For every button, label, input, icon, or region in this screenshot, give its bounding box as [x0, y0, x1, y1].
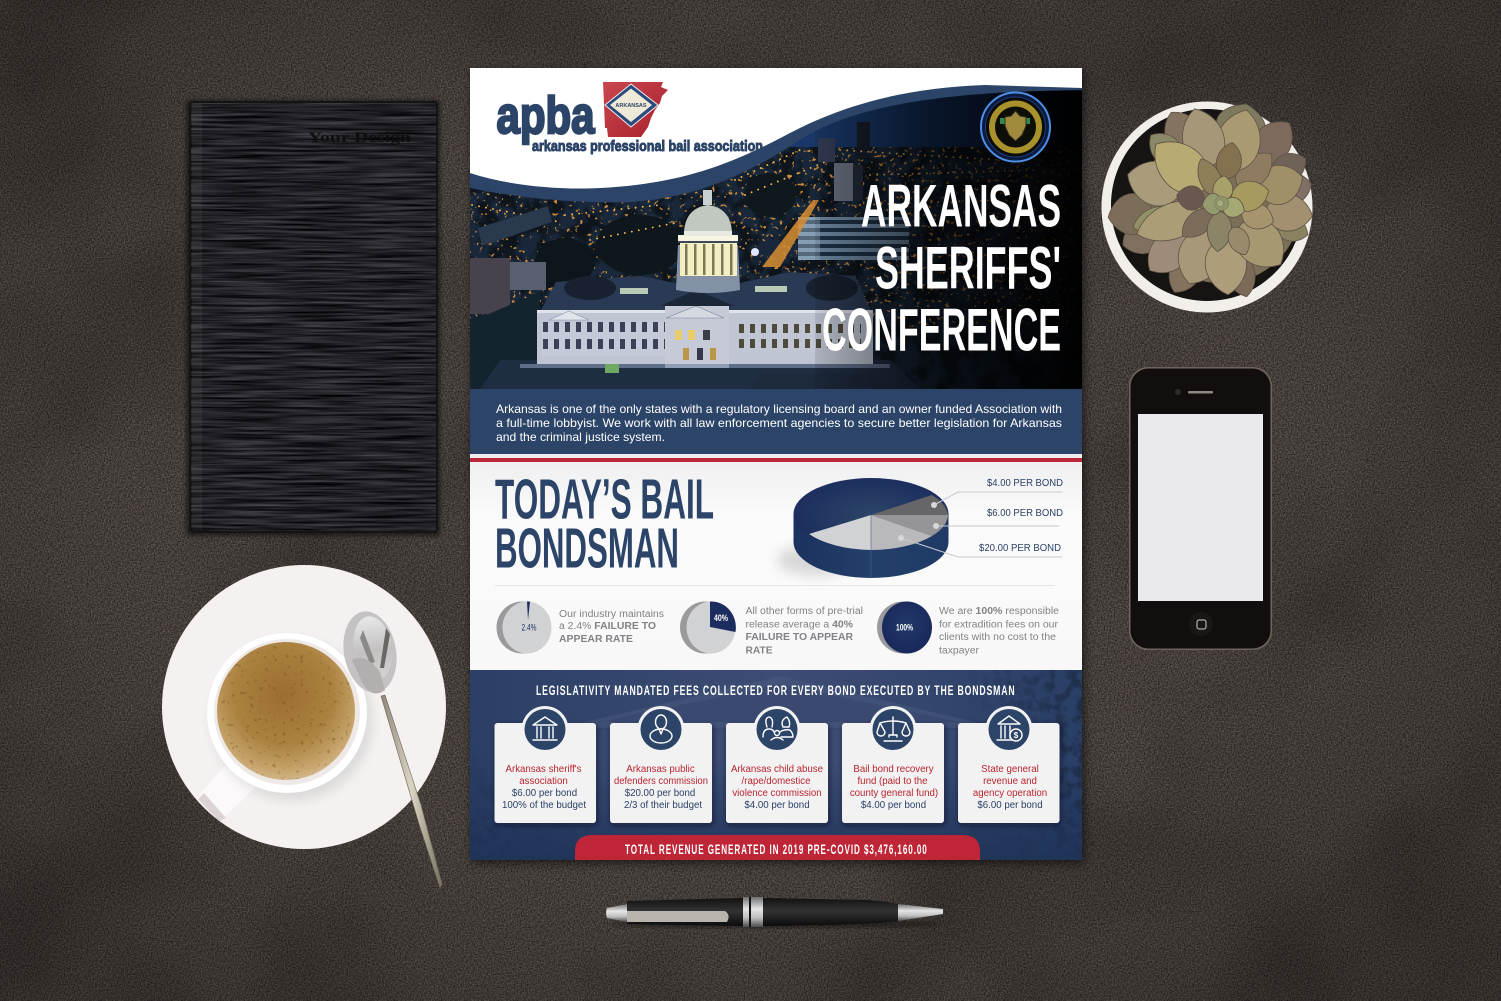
icon: person [650, 715, 672, 743]
logo: apba with Arkansas flag map: arkansas professional bail association [532, 138, 763, 155]
section heading: TODAY’S BAIL [495, 468, 714, 532]
section heading: LEGISLATIVITY MANDATED FEES COLLECTED FOR EVERY BOND EXECUTED BY THE BONDSMAN [536, 683, 1015, 699]
stat: 40% failure rate [680, 601, 863, 656]
stat: 40% failure rate: 40% [714, 613, 728, 623]
trees [596, 215, 684, 275]
poster [450, 68, 1082, 860]
icon: family [763, 717, 793, 740]
card: sheriff's association [494, 706, 596, 823]
card: state general revenue: $6.00 per bond [977, 800, 1043, 811]
card: public defenders: Arkansas public [626, 764, 695, 775]
smartphone with blank screen [1129, 367, 1272, 650]
title [822, 172, 1061, 364]
card: sheriff's association: 100% of the budget [502, 800, 586, 811]
phone home button [1189, 612, 1213, 636]
office block [798, 217, 909, 260]
notebook emboss text: Your Design [308, 130, 412, 146]
phone screen [1138, 414, 1263, 601]
skyline towers [857, 122, 870, 158]
card: sheriff's association: association [519, 776, 568, 787]
grounds [470, 292, 540, 389]
card: bail bond recovery fund: county general fund) [850, 788, 938, 799]
card: child abuse commission [726, 706, 828, 823]
pot [1102, 102, 1312, 312]
card: state general revenue: State general [981, 764, 1039, 775]
cup [198, 633, 372, 821]
stat: 40% failure rate: FAILURE TO APPEAR [746, 632, 853, 643]
pen [606, 897, 943, 928]
stat: 40% failure rate: All other forms of pre-trial [746, 606, 863, 617]
right darkening for title [815, 91, 1082, 389]
total revenue banner [575, 835, 980, 860]
capitol facade [537, 312, 873, 364]
card: public defenders: 2/3 of their budget [624, 800, 702, 811]
succulent leaves [1106, 98, 1315, 300]
capitol dome [676, 190, 740, 293]
card: child abuse commission: /rape/domestice [742, 776, 810, 787]
stat: 40% failure rate: release average a 40% [746, 620, 853, 630]
photo: night view of capitol [450, 85, 1082, 389]
stat: 100% responsible: for extradition fees on our [939, 620, 1059, 630]
card: state general revenue [958, 706, 1060, 823]
phone speaker [1188, 391, 1213, 394]
stat: 2.4% failure rate: Our industry maintains [559, 609, 664, 620]
stat: 100% responsible: 100% [896, 622, 913, 632]
stat: 100% responsible: clients with no cost to the [939, 632, 1057, 643]
title: SHERIFFS' [875, 234, 1061, 302]
icon: courthouse [533, 717, 557, 740]
left buildings [470, 258, 510, 314]
stat: 40% failure rate: RATE [746, 646, 773, 656]
total revenue banner: TOTAL REVENUE GENERATED IN 2019 PRE-COVID $3,476,160.00 [625, 843, 927, 858]
coffee cup on saucer with spoon [162, 565, 446, 888]
flag map [603, 82, 668, 137]
intro text band [470, 389, 1082, 454]
card: sheriff's association: $6.00 per bond [512, 788, 577, 799]
intro text band: a full-time lobbyist. We work with all law enforcement agencies to secure better legislation for Arkansas [496, 416, 1062, 430]
street lights [472, 150, 1040, 240]
intro text band: Arkansas is one of the only states with a regulatory licensing board and an owner funded Association with [496, 402, 1062, 416]
orange street [762, 200, 819, 267]
card: child abuse commission: Arkansas child abuse [731, 764, 823, 775]
pie leader lines [901, 492, 1062, 557]
stat: 2.4% failure rate [496, 602, 664, 654]
card: bail bond recovery fund: Bail bond recovery [853, 764, 934, 775]
stat: 2.4% failure rate: APPEAR RATE [559, 634, 633, 645]
card: bail bond recovery fund: fund (paid to the [857, 776, 928, 787]
icon: bank with money bag [997, 716, 1022, 741]
card: bail bond recovery fund: $4.00 per bond [861, 800, 926, 811]
card: public defenders: $20.00 per bond [625, 788, 695, 799]
card: public defenders [610, 706, 712, 823]
section: today's bail bondsman [470, 454, 1082, 670]
header: photo with wave and logo [450, 82, 1082, 389]
stat: 100% responsible: We are 100% responsible [939, 606, 1060, 617]
card: state general revenue: agency operation [973, 788, 1047, 799]
intro text band: and the criminal justice system. [496, 430, 665, 444]
3D pie chart: $20.00 PER BOND [979, 542, 1061, 554]
card: bail bond recovery fund [842, 706, 944, 823]
stat: 2.4% failure rate: 2.4% [522, 622, 536, 632]
seal badge [981, 92, 1050, 162]
wave band [470, 85, 1082, 389]
card: child abuse commission: violence commission [732, 788, 822, 799]
card: state general revenue: $ [1014, 731, 1019, 740]
pie labels: $4.00 PER BOND [987, 477, 1063, 489]
card: public defenders: defenders commission [614, 776, 708, 787]
notebook: black leather cover [186, 100, 440, 536]
capitol roof [540, 272, 872, 312]
stat: 100% responsible: taxpayer [939, 646, 980, 656]
logo: apba with Arkansas flag map [496, 82, 763, 155]
section heading: BONDSMAN [495, 516, 679, 580]
3D pie chart: $6.00 PER BOND [987, 507, 1063, 519]
section: legislatively mandated fees [470, 670, 1082, 860]
lot lights [751, 248, 759, 256]
icon: scales [877, 717, 910, 741]
succulent plant in white pot [1102, 98, 1315, 312]
saucer [162, 565, 446, 849]
flag map: ARKANSAS [615, 103, 647, 109]
card: child abuse commission: $4.00 per bond [744, 800, 810, 811]
title: CONFERENCE [822, 296, 1061, 364]
stat: 2.4% failure rate: a 2.4% FAILURE TO [559, 621, 656, 632]
spoon [337, 607, 442, 888]
card: sheriff's association: Arkansas sheriff's [506, 764, 582, 775]
logo: apba with Arkansas flag map: apba [496, 87, 595, 145]
title: ARKANSAS [861, 172, 1061, 240]
stat: 100% responsible [877, 602, 1060, 656]
section heading [495, 468, 714, 580]
card: state general revenue: revenue and [983, 776, 1037, 787]
3D pie chart [777, 477, 1063, 578]
